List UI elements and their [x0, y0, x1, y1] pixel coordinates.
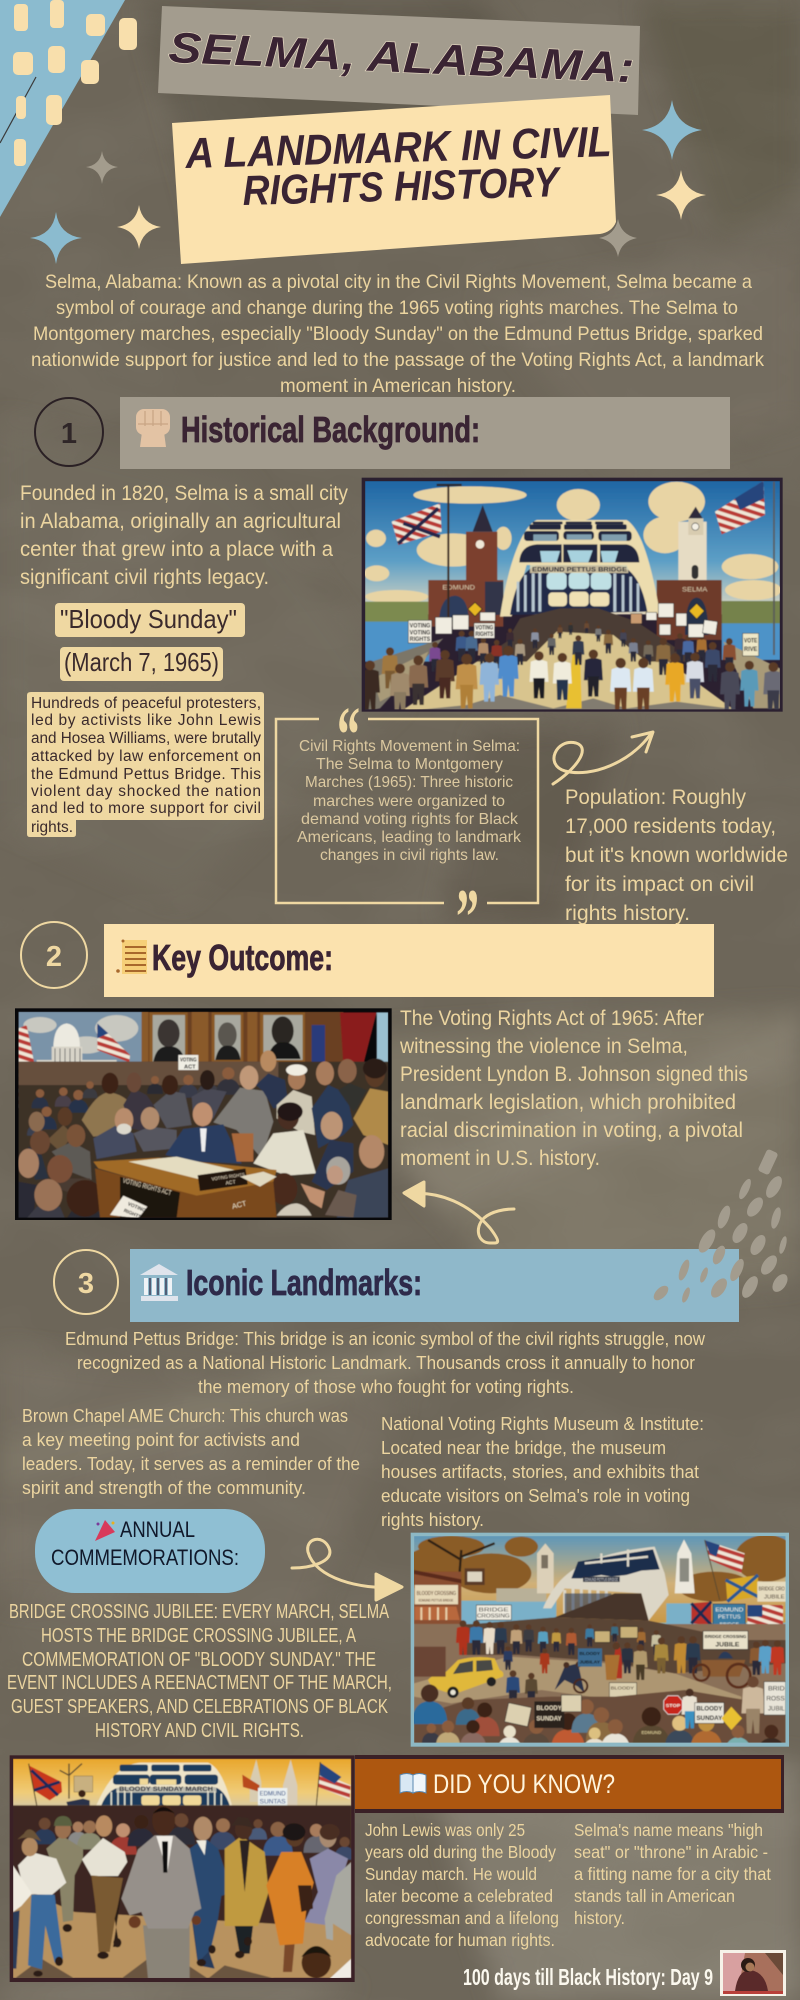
text block: Bloody Sunday details: led by activists like John Lewis: [31, 712, 261, 729]
paragraph: Brown Chapel AME Church: leaders. Today, it serves as a reminder of the: [22, 1453, 360, 1474]
quote text: Marches (1965): Three historic: [305, 774, 513, 791]
text block: John Lewis fact: advocate for human rights.: [365, 1930, 555, 1950]
flags: [392, 503, 442, 545]
thumbnail portrait: [720, 1950, 786, 1996]
paragraph: population: 17,000 residents today,: [565, 815, 776, 838]
towers: [250, 1759, 261, 1802]
paragraph: Brown Chapel AME Church: Brown Chapel AME Church: This church was: [22, 1405, 348, 1426]
tan pants man: [82, 1838, 127, 1876]
crowd signs: BRIDGE: [479, 1607, 509, 1613]
section 3 number badge: [54, 1250, 118, 1314]
white tower and brick building right: SELMA: [682, 588, 707, 594]
paragraph: Voting Rights Act of 1965: racial discrimination in voting, a pivotal: [400, 1119, 743, 1142]
intro paragraph: nationwide support for justice and led to the passage of the Voting Rights Act, a landmark: [31, 349, 764, 371]
signs: [66, 1775, 288, 1806]
section 1 heading: Historical Background: [120, 397, 730, 469]
arrow: curly arrow to signing photo: [404, 1182, 514, 1243]
section 2 number badge: 2: [46, 941, 62, 973]
text block: Bloody Sunday details: and Hosea Williams, were brutally: [31, 730, 261, 747]
signs: RIVE: [744, 647, 757, 653]
text block: Selma name fact: stands tall in American: [574, 1886, 735, 1906]
sign: [178, 1055, 198, 1070]
crowd signs: BRIDGE CROSSING: [705, 1634, 747, 1639]
intro paragraph: Montgomery marches, especially "Bloody Sunday" on the Edmund Pettus Bridge, sparked: [33, 323, 763, 345]
paragraph: population: [565, 786, 788, 925]
marchers: [13, 1805, 351, 1979]
text block: Selma name fact: history.: [574, 1908, 625, 1928]
photo: Bridge Crossing Jubilee crowd: [401, 1533, 798, 1756]
text block: Bloody Sunday details: the Edmund Pettus Bridge. This: [31, 766, 261, 783]
paragraph: founded in 1820: [20, 482, 348, 589]
text block: Selma name fact: a fitting name for a city that: [574, 1864, 771, 1884]
portraits: [149, 1012, 305, 1064]
road and rail: [404, 630, 732, 710]
wagon: [693, 1644, 750, 1687]
quote text: The Selma to Montgomery: [316, 756, 503, 773]
flags and signs upper right: JUBILE: [764, 1594, 785, 1600]
desk: VOTING RIGHTS: [211, 1172, 245, 1182]
far marchers: [429, 621, 736, 682]
podium: [555, 1642, 622, 1693]
foreground signs: STOP: [666, 1703, 681, 1709]
photo: Bridge Crossing Jubilee crowd: EDMUND: [641, 1730, 662, 1736]
quote text: demand voting rights for Black: [301, 811, 519, 828]
background heads row: [33, 1813, 355, 1860]
arrow: curly arrow to jubilee photo: [292, 1539, 402, 1600]
pill: Annual Commemorations: ANNUAL: [120, 1517, 195, 1542]
paragraph: Brown Chapel AME Church: spirit and strength of the community.: [22, 1477, 306, 1498]
icon: classical building: [140, 1264, 178, 1301]
paragraph: Bridge Crossing Jubilee: GUEST SPEAKERS, AND CELEBRATIONS OF BLACK: [11, 1696, 388, 1718]
crowd signs: BLOODY: [611, 1685, 635, 1691]
icon: party popper: [95, 1520, 115, 1541]
quote mark open: “: [337, 692, 360, 780]
section 2 heading: Key Outcome: Key Outcome:: [152, 937, 333, 978]
paragraph: Voting Rights Act of 1965: moment in U.S. history.: [400, 1147, 600, 1170]
foot shoes: [33, 1924, 252, 1977]
distant crowd: [477, 608, 697, 662]
paragraph: Brown Chapel AME Church: a key meeting point for activists and: [22, 1429, 300, 1450]
banner: Did You Know: [355, 1755, 784, 1813]
bottom crowd: [414, 1690, 786, 1743]
signs: RIGHTS: [410, 637, 430, 643]
text block: Bloody Sunday details: violent day shocked the nation: [31, 783, 261, 800]
paragraph: founded in 1820: in Alabama, originally an agricultural: [20, 510, 341, 533]
brick building left: EDMUND: [442, 586, 476, 592]
quote text: marches were organized to: [313, 793, 505, 810]
storefront: [414, 1568, 485, 1625]
crowd signs: CROSSING: [477, 1614, 510, 1620]
banner: Did You Know: DID YOU KNOW?: [433, 1769, 615, 1799]
paragraph: population: Population: Roughly: [565, 786, 746, 809]
photo: signing of the Voting Rights Act: [15, 1008, 392, 1221]
paragraph: Bridge Crossing Jubilee: HOSTS THE BRIDGE CROSSING JUBILEE, A: [41, 1625, 356, 1647]
paragraph: Voting Rights Act of 1965: landmark legislation, which prohibited: [400, 1091, 736, 1114]
desk: ACT: [225, 1179, 236, 1187]
arch bridge: [500, 520, 660, 617]
paragraph: Voting Rights Act of 1965: [399, 1007, 748, 1170]
paragraph: Bridge Crossing Jubilee: HISTORY AND CIVIL RIGHTS.: [95, 1720, 304, 1742]
foreground signs: SUNDAY: [696, 1716, 722, 1722]
text block: Bloody Sunday details: rights.: [31, 819, 73, 836]
arch bridge: BLOODY SUNDAY MARCH: [119, 1787, 213, 1793]
section 3 heading: Iconic Landmarks: [130, 1249, 739, 1322]
flags and signs upper right: BRIDGE: [720, 1621, 739, 1626]
label: March 7, 1965: (March 7, 1965): [64, 647, 219, 677]
quote text: Americans, leading to landmark: [297, 829, 522, 846]
section 2 heading: Key Outcome: [104, 924, 714, 997]
ground: [13, 1805, 351, 1978]
taxi: [428, 1657, 503, 1698]
flags and signs upper right: [691, 1540, 786, 1628]
foreground signs: JUBIL: [768, 1706, 785, 1713]
left man: [18, 1852, 66, 1895]
text block: John Lewis fact: congressman and a lifelong: [365, 1908, 559, 1928]
label: Bloody Sunday: "Bloody Sunday": [60, 604, 237, 634]
flags and signs upper right: PETTUS: [718, 1615, 741, 1621]
title banner: Selma, Alabama: SELMA, ALABAMA:: [168, 24, 635, 92]
text block: John Lewis fact: Sunday march. He would: [365, 1864, 537, 1884]
paragraph: Bridge Crossing Jubilee: COMMEMORATION OF "BLOODY SUNDAY." THE: [22, 1649, 376, 1671]
icon: scroll: [116, 940, 147, 974]
icon: raised fist: [136, 409, 170, 447]
text block: Selma name fact: Selma's name means "high: [574, 1820, 763, 1840]
paragraph: Edmund Pettus Bridge: recognized as a National Historic Landmark. Thousands cross it annually to honor: [77, 1352, 695, 1373]
foreground signs: [505, 1682, 786, 1730]
paragraph: population: but it's known worldwide: [565, 844, 788, 867]
paragraph: Voting Rights Act of 1965: The Voting Rights Act of 1965: After: [400, 1007, 704, 1030]
intro paragraph: Selma, Alabama: Known as a pivotal city in the Civil Rights Movement, Selma became a: [45, 271, 752, 293]
section 3 number badge: 3: [78, 1268, 94, 1300]
foreground signs: BLOODY: [696, 1707, 722, 1713]
signs: VOTING: [410, 630, 431, 636]
subtitle note: A landmark in civil rights history: A LANDMARK IN CIVIL: [184, 118, 612, 178]
right grey man: [325, 1862, 351, 1940]
text block: Selma name fact: seat" or "throne" in Arabic -: [574, 1842, 768, 1862]
arch bridge: EDMUND PETTUS BRIDGE: [532, 566, 628, 573]
text block: Bloody Sunday details: [27, 692, 264, 837]
paragraph: National Voting Rights Museum: educate visitors on Selma's role in voting: [381, 1485, 690, 1506]
text block: Bloody Sunday details: and led to more support for civil: [31, 800, 261, 817]
decorative blue brush stripe with yellow dashes: [0, 0, 137, 217]
quote text: Civil Rights Movement in Selma:: [299, 738, 520, 755]
blue suit: [191, 1915, 215, 1969]
signs: SUNTAS: [260, 1800, 286, 1806]
sign: VOTING: [180, 1058, 197, 1064]
signs: VOTING: [410, 624, 431, 630]
photo: Bloody Sunday march leaders: [10, 1755, 355, 1982]
capitol: [36, 1022, 118, 1062]
paragraph: population: for its impact on civil: [565, 873, 754, 896]
arch bridge: [96, 1763, 232, 1805]
quote mark close: ”: [456, 874, 479, 962]
section 1 number badge: [35, 398, 103, 466]
desk: [93, 1157, 277, 1221]
text block: John Lewis fact: John Lewis was only 25: [365, 1820, 525, 1840]
signs: [408, 602, 759, 656]
crowd signs: JUBILAY: [579, 1659, 600, 1664]
paragraph: Edmund Pettus Bridge: Edmund Pettus Bridge: This bridge is an iconic symbol of the civil rights struggle, now: [65, 1328, 706, 1349]
section 1 heading: Historical Background: Historical Background:: [181, 409, 480, 450]
paragraph: National Voting Rights Museum: rights history.: [381, 1509, 484, 1530]
paragraph: Edmund Pettus Bridge: [65, 1328, 706, 1397]
lamp post: [446, 485, 450, 617]
far crowd band: [461, 1617, 786, 1673]
arch bridge: EDMUND PETTUS BRIDGE: [585, 1577, 618, 1582]
paragraph: population: rights history.: [565, 902, 690, 925]
sign: ACT: [184, 1064, 196, 1070]
main attendees as colour blocks: [18, 1050, 388, 1218]
desk: VOTING RIGHTS ACT: [122, 1178, 172, 1197]
decorative sparkle stars: [30, 100, 706, 264]
orange dress: [283, 1944, 295, 1972]
crowd signs: BLOODY: [579, 1651, 600, 1656]
paragraph: National Voting Rights Museum: [381, 1413, 704, 1530]
crowd busts back rows: [27, 1067, 241, 1136]
photo: marchers on Edmund Pettus Bridge: [360, 478, 783, 713]
storefront: BLOODY CROSSING: [417, 1591, 456, 1597]
paragraph: National Voting Rights Museum: National Voting Rights Museum & Institute:: [381, 1413, 704, 1434]
section 2 number badge: [21, 922, 87, 988]
title banner: Selma, Alabama: [158, 6, 640, 115]
quote text: changes in civil rights law.: [320, 847, 499, 864]
paragraph: Bridge Crossing Jubilee: BRIDGE CROSSING JUBILEE: EVERY MARCH, SELMA: [9, 1601, 389, 1623]
section 3 heading: Iconic Landmarks: Iconic Landmarks:: [186, 1262, 422, 1303]
pill: Annual Commemorations: COMMEMORATIONS:: [51, 1545, 239, 1570]
paragraph: Voting Rights Act of 1965: President Lyndon B. Johnson signed this: [400, 1063, 748, 1086]
text block: Selma name fact: [574, 1820, 771, 1928]
text block: Bloody Sunday details: Hundreds of peaceful protesters,: [31, 695, 261, 712]
paragraph: Voting Rights Act of 1965: witnessing the violence in Selma,: [399, 1035, 688, 1058]
crowd signs: [476, 1605, 748, 1701]
section 1 number badge: 1: [61, 418, 77, 450]
signs: VOTING: [475, 625, 494, 631]
gray suit leader: [143, 1925, 190, 1979]
white tower and brick building right: [657, 507, 722, 640]
signs: VOTE: [744, 638, 757, 644]
icon: open book: [400, 1774, 426, 1793]
foreground marchers: [360, 646, 783, 713]
ground: [414, 1623, 786, 1712]
desk: RIGHTS: [123, 1208, 143, 1221]
subtitle note: A landmark in civil rights history: RIGHTS HISTORY: [242, 158, 563, 214]
text block: John Lewis fact: [365, 1820, 559, 1950]
paragraph: National Voting Rights Museum: Located near the bridge, the museum: [381, 1437, 666, 1458]
paragraph: Brown Chapel AME Church: [22, 1405, 360, 1498]
subtitle note: A landmark in civil rights history: [172, 95, 637, 264]
standing figures row: [456, 1620, 784, 1705]
signs: RIGHTS: [475, 632, 493, 638]
storefront: EDMUND PETTUS BRIDGE: [419, 1597, 454, 1602]
foreground signs: BRID: [768, 1686, 785, 1693]
arrow: curly arrow to photo: [553, 732, 653, 784]
desk: ACT: [231, 1199, 248, 1211]
lavender woman: [305, 1849, 348, 1925]
flags: [97, 1023, 130, 1062]
arch bridge: [543, 1547, 669, 1621]
foreground signs: ROSS: [766, 1696, 785, 1703]
flags: [29, 1762, 351, 1812]
crowd signs: JUBILE: [715, 1642, 740, 1649]
towers: [537, 1539, 695, 1593]
paragraph: founded in 1820: Founded in 1820, Selma is a small city: [20, 482, 348, 505]
paragraph: National Voting Rights Museum: houses artifacts, stories, and exhibits that: [381, 1461, 699, 1482]
text block: John Lewis fact: later become a celebrated: [365, 1886, 553, 1906]
desk: VOTING: [127, 1201, 147, 1214]
pill: Annual Commemorations: [35, 1509, 265, 1593]
paragraph: Bridge Crossing Jubilee: EVENT INCLUDES A REENACTMENT OF THE MARCH,: [7, 1672, 392, 1694]
intro paragraph: symbol of courage and change during the 1965 voting rights marches. The Selma to: [56, 297, 738, 319]
paragraph: Edmund Pettus Bridge: the memory of those who fought for voting rights.: [198, 1376, 574, 1397]
paragraph: founded in 1820: significant civil rights legacy.: [20, 566, 269, 589]
yellow coat: [235, 1925, 253, 1954]
callout: Civil Rights Movement in Selma quote box: [276, 692, 538, 962]
brick building left: [428, 505, 503, 627]
foreground signs: BLOODY: [536, 1706, 562, 1712]
intro paragraph: moment in American history.: [280, 375, 516, 397]
olive man: [46, 1835, 83, 1922]
flags and signs upper right: EDMUND: [715, 1608, 743, 1614]
intro paragraph: [31, 271, 764, 397]
foreground signs: SUNDAY: [536, 1717, 562, 1723]
paragraph: Bridge Crossing Jubilee: [7, 1601, 392, 1742]
text block: Bloody Sunday details: attacked by law enforcement on: [31, 748, 261, 765]
quote text: [297, 738, 522, 864]
flags and signs upper right: BRIDGE CRO: [759, 1587, 785, 1593]
paragraph: founded in 1820: center that grew into a place with a: [20, 538, 333, 561]
child: [302, 1947, 331, 1978]
decorative grey brush marks: [651, 1149, 791, 1304]
text block: John Lewis fact: years old during the Bloody: [365, 1842, 556, 1862]
signs: EDMUND: [260, 1791, 286, 1797]
